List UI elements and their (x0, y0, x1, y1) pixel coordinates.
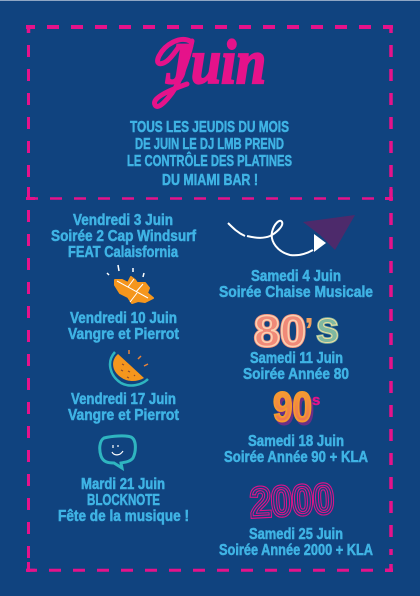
event: Vendredi 3 Juin: FEAT Calaisfornia (68, 244, 178, 261)
graphic: 2000: 2000 (249, 475, 335, 526)
intro text: TOUS LES JEUDIS DU MOIS (130, 119, 289, 136)
event: Mardi 21 Juin: Fête de la musique ! (58, 508, 189, 525)
graphic: 90s: s (312, 392, 320, 409)
event: Vendredi 10 Juin: Vendredi 10 Juin (70, 310, 177, 327)
event: Samedi 11 Juin: Samedi 11 Juin (250, 350, 343, 367)
event: Samedi 4 Juin (219, 268, 373, 301)
graphic: 80's (254, 303, 339, 356)
graphic: 80's: s (316, 303, 339, 352)
event: Vendredi 3 Juin: Vendredi 3 Juin (73, 212, 173, 229)
intro text: LE CONTRÔLE DES PLATINES (127, 151, 292, 170)
event: Samedi 4 Juin: Soirée Chaise Musicale (219, 284, 373, 301)
icon: watermelon (110, 350, 148, 386)
event: Samedi 25 Juin: Samedi 25 Juin (249, 526, 343, 543)
graphic: 90s: 90 (273, 383, 312, 430)
event: Mardi 21 Juin (58, 476, 189, 525)
event: Vendredi 17 Juin: Vangre et Pierrot (68, 407, 180, 424)
event: Samedi 18 Juin: Samedi 18 Juin (248, 433, 344, 450)
event: Samedi 11 Juin: Soirée Année 80 (243, 366, 349, 383)
event: Mardi 21 Juin: Mardi 21 Juin (81, 476, 165, 493)
icon: paper plane (228, 215, 355, 255)
event: Vendredi 10 Juin: Vangre et Pierrot (68, 326, 180, 343)
event: Samedi 11 Juin (243, 350, 349, 383)
event: Samedi 25 Juin: Soirée Année 2000 + KLA (219, 542, 373, 559)
event: Samedi 18 Juin: Soirée Année 90 + KLA (224, 449, 368, 466)
event: Samedi 4 Juin: Samedi 4 Juin (251, 268, 341, 285)
event: Vendredi 17 Juin: Vendredi 17 Juin (71, 391, 176, 408)
event: Vendredi 3 Juin (51, 212, 197, 261)
graphic: 80's: s (316, 303, 339, 352)
event: Samedi 25 Juin (219, 526, 373, 559)
intro text (127, 119, 292, 189)
event: Vendredi 17 Juin (68, 391, 180, 424)
icon: speech bubble (100, 436, 135, 468)
icon: autumn leaf (107, 265, 153, 303)
event: Mardi 21 Juin: BLOCKNOTE (87, 492, 160, 509)
graphic: 90s: 90 (275, 386, 314, 433)
event: Vendredi 10 Juin (68, 310, 180, 343)
graphic: 80's: 80 (254, 307, 306, 356)
event: Samedi 18 Juin (224, 433, 368, 466)
graphic: 2000: 2000 (249, 475, 335, 526)
title: Juin (165, 29, 266, 97)
event: Vendredi 3 Juin: Soirée 2 Cap Windsurf (51, 228, 197, 245)
intro text: DE JUIN LE DJ LMB PREND (135, 136, 284, 153)
graphic: 80's: ’ (304, 310, 314, 351)
intro text: DU MIAMI BAR ! (162, 172, 258, 189)
graphic: 80's: 80 (254, 307, 306, 356)
